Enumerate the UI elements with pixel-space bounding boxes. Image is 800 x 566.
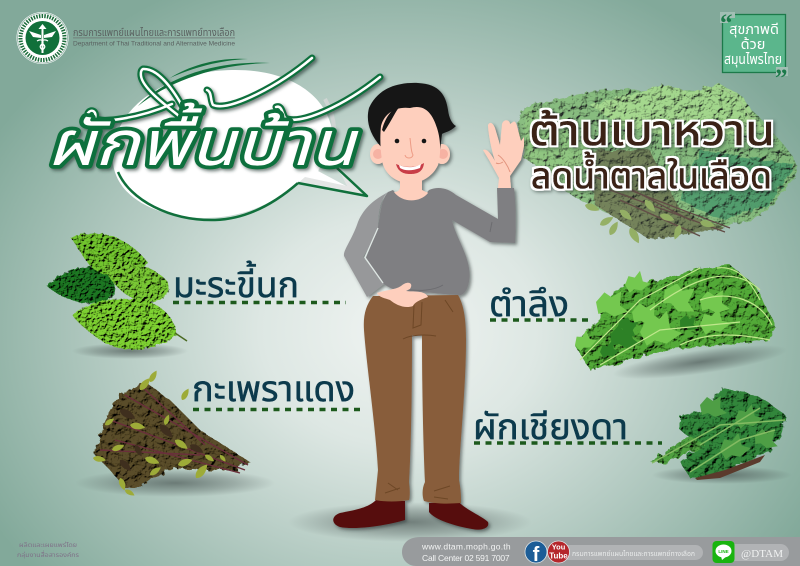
title: ผักพื้นบ้าน: ผักพื้นบ้าน (47, 102, 360, 179)
logo: Department of Thai Traditional and Alternative Medicine (16, 12, 236, 64)
tag: สุขภาพดีด้วยสมุนไพรไทย: “ (720, 10, 732, 37)
line id pill: @DTAM (741, 548, 783, 560)
icon: facebook (525, 541, 547, 566)
icon: youtube (548, 541, 570, 563)
vegetable: bitter gourd (47, 233, 188, 359)
vegetable: gymnema (650, 388, 792, 484)
waving hand (483, 120, 524, 188)
vegetable: ivy gourd (571, 265, 789, 386)
tag: สุขภาพดีด้วยสมุนไพรไทย (720, 10, 788, 92)
heading: ต้านเบาหวาน ลดน้ำตาลในเลือด (529, 107, 775, 196)
belly hand (377, 283, 428, 307)
faded vegetable cluster behind heading (505, 84, 797, 245)
hair (368, 83, 456, 150)
tag: สุขภาพดีด้วยสมุนไพรไทย: สุขภาพดี (729, 22, 779, 38)
tag: สุขภาพดีด้วยสมุนไพรไทย: สมุนไพรไทย (724, 52, 782, 68)
speech bubble behind title (113, 59, 367, 220)
line id pill (725, 544, 789, 561)
icon: LINE: LINE (718, 549, 729, 554)
label: มะระขี้นก: มะระขี้นก (173, 260, 299, 305)
ears (370, 144, 386, 164)
title: ผักพื้นบ้าน (47, 58, 380, 179)
tag: สุขภาพดีด้วยสมุนไพรไทย: ” (775, 65, 788, 92)
department names (73, 27, 236, 48)
icon: youtube: You (552, 542, 566, 552)
icon: facebook: f (533, 544, 540, 566)
man character (333, 83, 524, 530)
footer bar (402, 537, 800, 566)
neck (394, 170, 428, 200)
tag: สุขภาพดีด้วยสมุนไพรไทย: ด้วย (741, 37, 765, 53)
website and call center: www.dtam.moph.go.th (421, 542, 511, 552)
facebook pill: กรมการแพทย์แผนไทยและการแพทย์ทางเลือก (572, 550, 695, 558)
credit text: ผลิตและเผยแพร่โดย (19, 540, 77, 549)
man shadow (288, 502, 532, 542)
department names: Department of Thai Traditional and Alternative Medicine (73, 40, 236, 48)
facebook pill (560, 545, 703, 560)
face (380, 107, 440, 183)
icon: LINE (712, 541, 734, 563)
credit text (17, 540, 79, 560)
credit text: กลุ่มงานสื่อสารองค์กร (17, 550, 79, 560)
label: ตำลึง: ตำลึง (489, 283, 569, 324)
shirt (366, 188, 516, 295)
heading: ต้านเบาหวาน ลดน้ำตาลในเลือด: ต้านเบาหวาน (529, 107, 775, 154)
icon: youtube: Tube (549, 552, 568, 560)
department names: กรมการแพทย์แผนไทยและการแพทย์ทางเลือก (73, 27, 235, 39)
website and call center: Call Center 02 591 7007 (422, 553, 510, 563)
label: กะเพราแดง: กะเพราแดง (192, 368, 355, 409)
label: ผักเชียงดา: ผักเชียงดา (473, 406, 628, 447)
website and call center (421, 542, 511, 563)
shoes (333, 500, 488, 530)
heading: ต้านเบาหวาน ลดน้ำตาลในเลือด: ลดน้ำตาลในเลือด (531, 151, 772, 196)
vegetable: red holy basil (75, 369, 275, 497)
trousers (364, 295, 466, 504)
